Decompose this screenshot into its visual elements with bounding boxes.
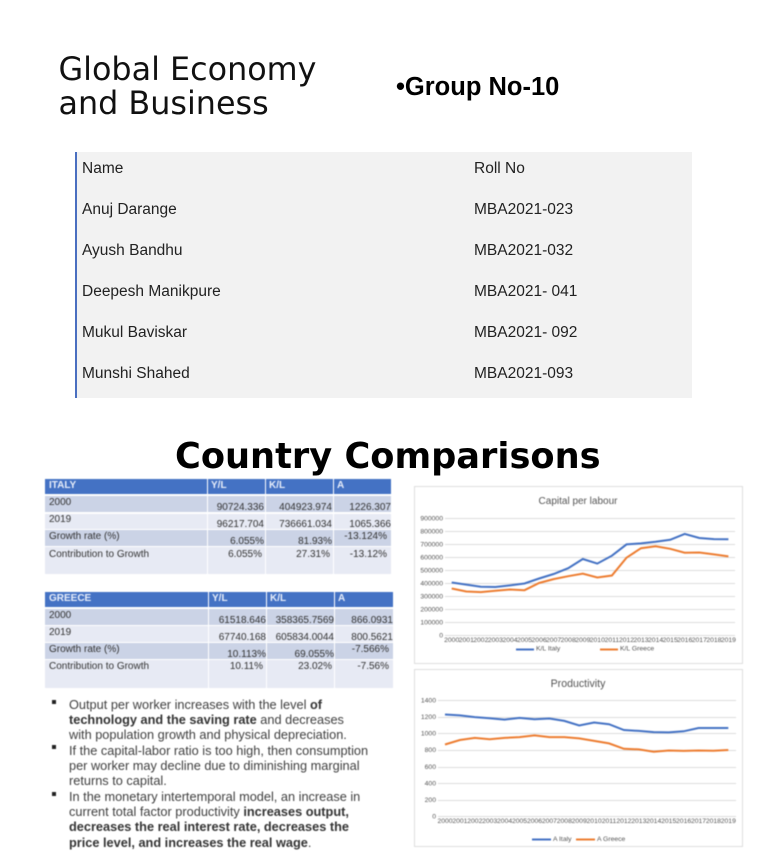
member row: MBA2021-093	[474, 364, 573, 382]
y axis labels: 200000	[420, 606, 443, 614]
x axis labels: 2019	[721, 637, 736, 644]
chart title: Capital per labour	[539, 496, 618, 507]
Italy growth rate row: Growth rate (%)	[49, 531, 120, 542]
text block: key points: technology and the saving rate and decreases	[69, 712, 344, 727]
Italy 2019 row: 96217.704	[217, 519, 264, 530]
title: Global Economy	[58, 51, 316, 88]
Italy 2019 row: 736661.034	[279, 519, 332, 530]
member row: MBA2021-032	[474, 242, 573, 258]
text block: key points: Output per worker increases with the level of	[69, 697, 322, 712]
chart legend: K/L Italy	[536, 646, 561, 652]
Greece 2000 row: 2000	[49, 610, 71, 621]
member row: Munshi Shahed	[82, 364, 190, 382]
Greece 2000 row: 358365.7569	[276, 615, 334, 626]
chart legend: K/L Greece	[620, 646, 654, 652]
Greece growth rate row: Growth rate (%)	[49, 644, 120, 655]
x axis labels: 2013	[633, 637, 649, 644]
x axis labels: 2003	[482, 818, 497, 825]
chart: productivity	[414, 668, 744, 848]
text block: key points	[51, 697, 368, 850]
Italy 2000 row	[48, 497, 392, 513]
Greece contribution row: 23.02%	[298, 661, 332, 672]
member row: Mukul Baviskar	[82, 324, 187, 340]
y axis labels: 800	[425, 747, 436, 754]
x axis labels: 2005	[512, 818, 527, 825]
panel: group member table	[75, 152, 692, 398]
Greece growth rate row: 10.113%	[227, 649, 266, 660]
chart title: Productivity	[551, 678, 606, 690]
table: Greece	[44, 591, 394, 688]
header row: Name	[82, 160, 123, 176]
line: K/L Greece	[452, 546, 728, 592]
Italy 2000 row: 2000	[49, 497, 71, 508]
Greece header: Y/L	[212, 593, 228, 604]
member row	[82, 364, 573, 382]
y axis labels: 0	[439, 632, 443, 640]
y axis labels: 600	[425, 764, 436, 771]
y axis labels: 1000	[421, 730, 436, 738]
y axis labels: 400000	[420, 580, 443, 588]
y axis labels: 100000	[420, 620, 443, 626]
y axis labels: 200	[425, 797, 436, 804]
table accent line	[75, 152, 76, 398]
member row	[82, 200, 573, 218]
Greece 2019 row: 605834.0044	[276, 632, 334, 643]
x axis labels: 2005	[517, 637, 532, 644]
title: and Business	[58, 85, 269, 122]
member row: Deepesh Manikpure	[82, 282, 221, 300]
Greece 2019 row: 67740.168	[219, 632, 266, 643]
text block: key points: per worker may decline due to diminishing marginal	[69, 758, 360, 773]
Italy header: ITALY	[49, 480, 76, 491]
x axis labels: 2012	[619, 637, 634, 644]
y axis labels: 500000	[420, 568, 443, 574]
x axis labels: 2018	[706, 637, 722, 644]
x axis labels: 2007	[546, 637, 561, 644]
x axis labels: 2013	[631, 818, 647, 825]
x axis labels: 2004	[497, 818, 512, 825]
Italy 2019 row: 2019	[49, 514, 71, 525]
x axis labels	[437, 818, 736, 825]
Greece contribution row: Contribution to Growth	[49, 661, 149, 672]
x axis labels: 2011	[605, 637, 619, 644]
member row	[82, 242, 573, 258]
x axis labels: 2004	[502, 637, 518, 644]
x axis labels: 2017	[691, 818, 706, 825]
Greece 2019 row: 800.5621	[351, 632, 393, 643]
Italy growth rate row: 6.055%	[230, 536, 264, 547]
Greece header: GREECE	[49, 593, 91, 604]
Italy growth rate row: -13.124%	[344, 531, 387, 542]
x axis labels: 2016	[677, 637, 692, 644]
Greece 2000 row: 866.0931	[351, 615, 393, 626]
member row: MBA2021-023	[474, 200, 573, 218]
x axis labels: 2015	[661, 818, 676, 825]
Greece header: A	[338, 593, 345, 604]
Italy header: A	[337, 480, 344, 491]
x axis labels: 2012	[616, 818, 632, 825]
x axis labels: 2000	[444, 637, 459, 644]
member row	[82, 282, 577, 300]
member row: Anuj Darange	[82, 200, 177, 218]
chart legend: A Italy	[553, 836, 572, 843]
text block: key points: In the monetary intertemporal model, an increase in	[69, 789, 360, 804]
member row	[82, 324, 577, 340]
x axis labels: 2002	[467, 818, 483, 825]
y axis labels	[421, 698, 436, 820]
Greece 2000 row: 61518.646	[219, 615, 266, 626]
x axis labels: 2008	[557, 818, 572, 825]
chart legend: A Greece	[597, 836, 626, 843]
line: K/L Italy	[452, 534, 728, 587]
member row: MBA2021- 092	[474, 324, 577, 340]
x axis labels: 2018	[706, 818, 721, 825]
Greece header: K/L	[270, 593, 286, 604]
header row	[82, 160, 525, 176]
x axis labels: 2010	[590, 637, 605, 644]
y axis labels: 600000	[420, 554, 443, 562]
Italy growth rate row: 81.93%	[298, 536, 332, 547]
y axis labels: 900000	[420, 516, 443, 522]
x axis labels: 2011	[602, 818, 617, 825]
x axis labels: 2009	[575, 637, 591, 644]
Greece header	[48, 592, 346, 604]
member row: Ayush Bandhu	[82, 242, 183, 258]
x axis labels: 2009	[572, 818, 587, 825]
Greece 2000 row	[48, 610, 393, 626]
x axis labels: 2010	[587, 818, 602, 825]
Italy 2000 row: 404923.974	[279, 502, 332, 513]
Greece growth rate row: -7.566%	[352, 644, 389, 655]
Italy contribution row: Contribution to Growth	[49, 549, 149, 560]
y axis labels: 300000	[420, 594, 443, 600]
x axis labels: 2003	[488, 637, 503, 644]
y axis labels: 700000	[420, 542, 443, 548]
text block: key points: with population growth and physical depreciation.	[69, 727, 347, 742]
Greece contribution row	[48, 660, 390, 672]
Italy contribution row: 6.055%	[228, 549, 262, 560]
line: A Greece	[445, 735, 728, 752]
y axis labels: 0	[432, 814, 436, 820]
chart legend	[516, 646, 654, 652]
y axis labels: 1200	[421, 714, 436, 721]
x axis labels: 2019	[721, 818, 736, 825]
Italy header: Y/L	[211, 480, 227, 491]
Greece growth rate row	[48, 644, 390, 660]
text block: key points: If the capital-labor ratio is too high, then consumption	[69, 743, 368, 758]
text block: key points: returns to capital.	[69, 773, 167, 788]
Italy header: K/L	[269, 480, 285, 491]
text block: key points: price level, and increases the real wage.	[69, 835, 311, 850]
table: Italy	[44, 478, 392, 574]
Italy 2019 row: 1065.366	[349, 519, 391, 530]
Italy 2019 row	[48, 514, 392, 530]
x axis labels: 2008	[561, 637, 576, 644]
x axis labels: 2000	[437, 818, 453, 825]
x axis labels: 2007	[542, 818, 557, 825]
x axis labels: 2017	[692, 637, 707, 644]
Italy 2000 row: 1226.307	[349, 502, 391, 513]
Italy contribution row: -13.12%	[350, 549, 387, 560]
x axis labels: 2015	[663, 637, 678, 644]
Italy 2000 row: 90724.336	[217, 502, 264, 513]
x axis labels: 2002	[473, 637, 489, 644]
chart legend	[532, 836, 626, 843]
y axis labels: 800000	[420, 528, 443, 536]
heading: country comparisons: Country Comparisons	[175, 436, 601, 477]
y axis labels: 1400	[421, 698, 436, 704]
Italy growth rate row	[48, 531, 388, 547]
y axis labels: 400	[425, 780, 436, 788]
Greece contribution row: -7.56%	[357, 661, 389, 672]
x axis labels: 2014	[648, 637, 663, 644]
group number: •Group No-10	[396, 73, 559, 101]
Italy contribution row	[48, 548, 388, 560]
y axis labels	[420, 516, 443, 640]
text block: key points: current total factor productivity increases output,	[69, 804, 349, 819]
x axis labels: 2016	[676, 818, 691, 825]
x axis labels	[444, 637, 736, 644]
x axis labels: 2006	[532, 637, 547, 644]
x axis labels: 2014	[646, 818, 661, 825]
member row: MBA2021- 041	[474, 282, 577, 300]
x axis labels: 2001	[452, 818, 468, 825]
Greece 2019 row: 2019	[49, 627, 71, 638]
text block: key points: decreases the real interest rate, decreases the	[69, 819, 349, 834]
x axis labels: 2006	[527, 818, 542, 825]
line: A Italy	[445, 714, 728, 732]
Greece growth rate row: 69.055%	[295, 649, 334, 660]
chart: capital per labour	[414, 486, 744, 664]
Greece contribution row: 10.11%	[230, 661, 263, 672]
Italy header	[48, 480, 344, 491]
x axis labels: 2001	[459, 637, 474, 644]
title	[58, 51, 316, 122]
header row: Roll No	[474, 160, 525, 176]
Greece 2019 row	[48, 627, 393, 643]
Italy contribution row: 27.31%	[296, 549, 330, 560]
